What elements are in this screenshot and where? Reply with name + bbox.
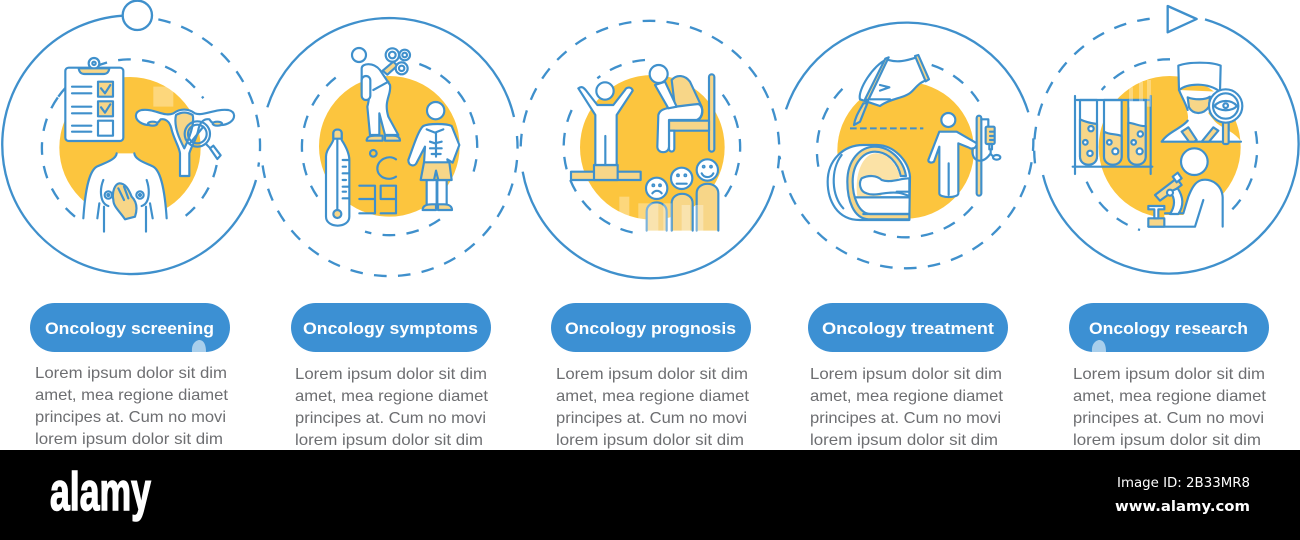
yellow disc: prognosis — [580, 75, 725, 220]
text block: symptoms description: Lorem ipsum dolor sit dim — [295, 366, 487, 383]
pill heading: Oncology prognosis — [551, 303, 751, 352]
icon: MRI scanner with patient — [828, 145, 910, 220]
outer ring: treatment — [780, 23, 1033, 268]
text block: screening description: Lorem ipsum dolor sit dim — [35, 365, 227, 382]
text block: screening description: lorem ipsum dolor sit dim — [35, 431, 223, 448]
text block: symptoms description: principes at. Cum no movi — [295, 410, 486, 427]
icon: thermometer — [326, 130, 349, 226]
text block: treatment description: lorem ipsum dolor sit dim — [810, 432, 998, 449]
yellow disc: symptoms — [319, 76, 460, 217]
icon: winner on podium — [571, 82, 641, 180]
text block: research description: Lorem ipsum dolor sit dim — [1073, 366, 1265, 383]
inner dashed ring: screening — [42, 59, 217, 220]
end marker triangle — [1168, 6, 1197, 32]
text block: treatment description — [810, 366, 1004, 449]
pill heading: Oncology treatment: Oncology treatment — [822, 320, 995, 338]
icon: person sitting with head in hands — [650, 65, 714, 152]
text block: symptoms description — [295, 366, 489, 449]
black footer band with credits — [0, 450, 1300, 540]
outer ring: prognosis — [521, 21, 779, 278]
text block: treatment description: amet, mea regione diamet — [810, 388, 1004, 405]
inner dashed ring: treatment — [817, 65, 982, 237]
text block: treatment description: principes at. Cum no movi — [810, 410, 1001, 427]
inner dashed ring: prognosis — [564, 60, 740, 233]
text block: research description: amet, mea regione diamet — [1073, 388, 1267, 405]
alamy logo: alamy — [50, 462, 151, 522]
text block: treatment description: Lorem ipsum dolor sit dim — [810, 366, 1002, 383]
start marker circle — [123, 1, 152, 30]
pill heading: Oncology symptoms: Oncology symptoms — [303, 320, 478, 338]
panel: oncology prognosis circle — [521, 21, 779, 278]
watermark fragment: prognosis — [619, 197, 703, 232]
panel: oncology research circle — [1034, 6, 1299, 274]
inner dashed ring: symptoms — [302, 64, 477, 235]
icon: gloved hand with scalpel — [854, 55, 929, 125]
pill heading: Oncology screening: Oncology screening — [45, 320, 214, 338]
yellow disc: research — [1099, 76, 1241, 218]
panel: oncology treatment circle — [780, 23, 1033, 268]
text block: research description: lorem ipsum dolor sit dim — [1073, 432, 1261, 449]
icon: patient with IV drip — [928, 113, 1000, 197]
inner dashed ring: research — [1087, 59, 1257, 230]
icon: three test tubes in rack — [1073, 96, 1152, 174]
text block: screening description — [35, 365, 229, 448]
website: www.alamy.com — [1115, 499, 1250, 515]
pill heading: Oncology research: Oncology research — [1089, 320, 1248, 338]
pill heading: Oncology screening — [30, 303, 230, 352]
outer ring: symptoms — [262, 18, 518, 276]
icon: researcher at microscope — [1148, 148, 1223, 227]
text block: prognosis description: Lorem ipsum dolor sit dim — [556, 366, 748, 383]
pill heading: Oncology treatment — [808, 303, 1008, 352]
icon: three rising smiley people — [646, 159, 718, 231]
text block: screening description: amet, mea regione diamet — [35, 387, 229, 404]
text block: screening description: principes at. Cum no movi — [35, 409, 226, 426]
icon: bent person with wind-up key — [352, 48, 410, 141]
yellow disc: screening — [59, 77, 201, 218]
text block: prognosis description — [556, 366, 750, 449]
pill heading: Oncology prognosis: Oncology prognosis — [565, 320, 736, 338]
watermark fragment: research — [1129, 80, 1151, 107]
icon: doctor with eye magnifier — [1162, 63, 1242, 144]
icon: clipboard checklist — [65, 58, 123, 141]
pill heading: Oncology research — [1069, 303, 1269, 352]
text block: prognosis description: principes at. Cum no movi — [556, 410, 747, 427]
text block: research description — [1073, 366, 1267, 449]
yellow disc: treatment — [837, 82, 974, 219]
outer ring: screening — [2, 16, 260, 274]
pill heading: Oncology symptoms — [291, 303, 491, 352]
image id: Image ID: 2B33MR8 — [1117, 475, 1250, 491]
text block: research description: principes at. Cum no movi — [1073, 410, 1264, 427]
icon: uterus under magnifier — [136, 110, 234, 176]
text block: prognosis description: amet, mea regione diamet — [556, 388, 750, 405]
watermark fragment: screening — [153, 87, 173, 107]
icon: torso with hand — [83, 153, 167, 233]
panel: oncology screening circle — [2, 1, 260, 274]
icon: temperature reading 39 degrees C — [359, 150, 396, 213]
icon: standing man with abdomen — [408, 102, 459, 210]
text block: symptoms description: lorem ipsum dolor sit dim — [295, 432, 483, 449]
incision dashed line — [850, 125, 923, 131]
text block: prognosis description: lorem ipsum dolor sit dim — [556, 432, 744, 449]
outer ring: research — [1034, 18, 1299, 274]
text block: symptoms description: amet, mea regione diamet — [295, 388, 489, 405]
panel: oncology symptoms circle — [262, 18, 518, 276]
